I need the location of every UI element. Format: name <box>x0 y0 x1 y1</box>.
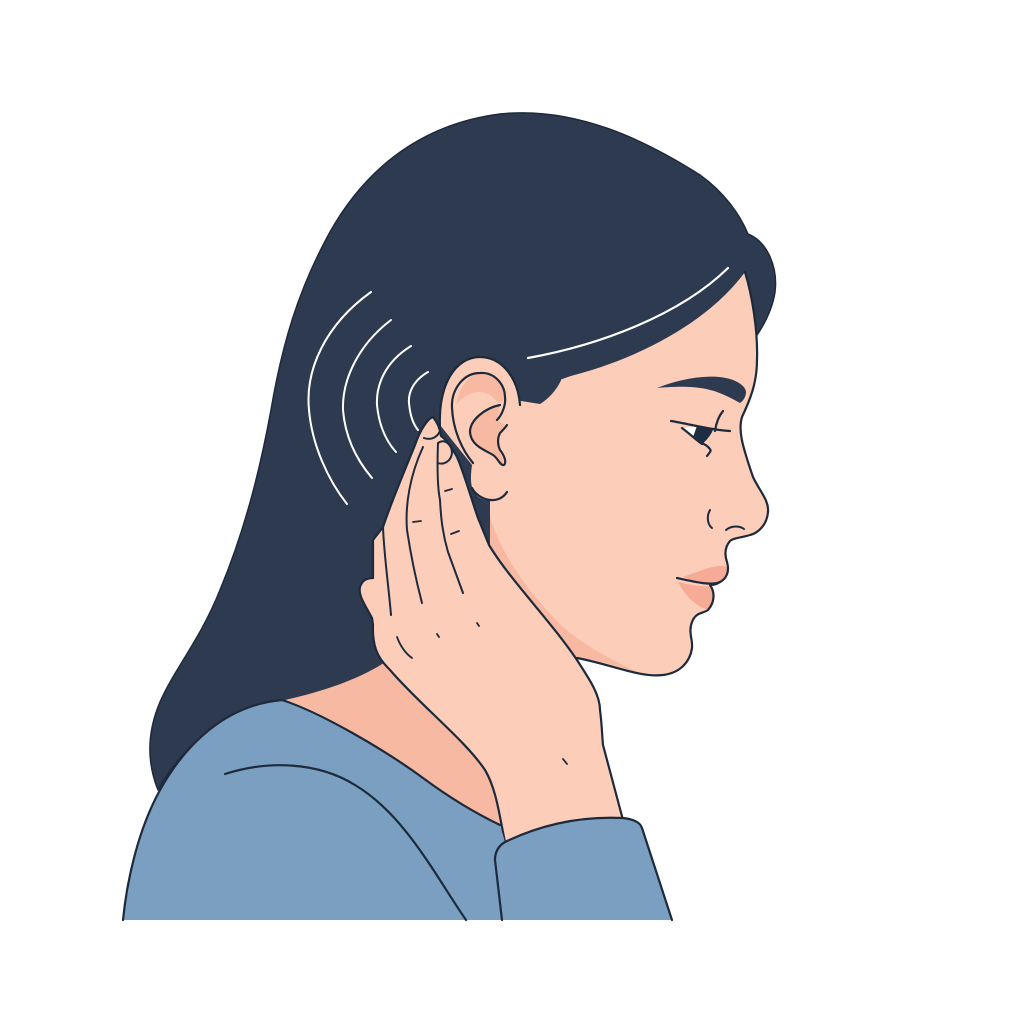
sleeve <box>495 818 672 920</box>
shirt body <box>123 700 505 920</box>
eye <box>671 411 730 456</box>
knuckle marks <box>397 489 567 764</box>
jaw shadow <box>490 517 640 673</box>
hair <box>150 113 776 790</box>
eyebrow <box>657 377 746 403</box>
hair fringe edge <box>562 252 748 378</box>
lips <box>677 566 728 610</box>
ear rim over fingertip <box>452 373 505 463</box>
face outline <box>577 272 768 675</box>
face <box>490 272 768 676</box>
shirt fold <box>225 765 466 920</box>
nose lines <box>708 510 744 530</box>
neck <box>285 655 520 830</box>
sleeve outline <box>495 818 672 920</box>
hand <box>360 373 623 842</box>
shirt outline <box>123 700 500 920</box>
sound waves <box>309 292 428 504</box>
hair highlight <box>528 268 728 358</box>
ear <box>440 357 520 501</box>
